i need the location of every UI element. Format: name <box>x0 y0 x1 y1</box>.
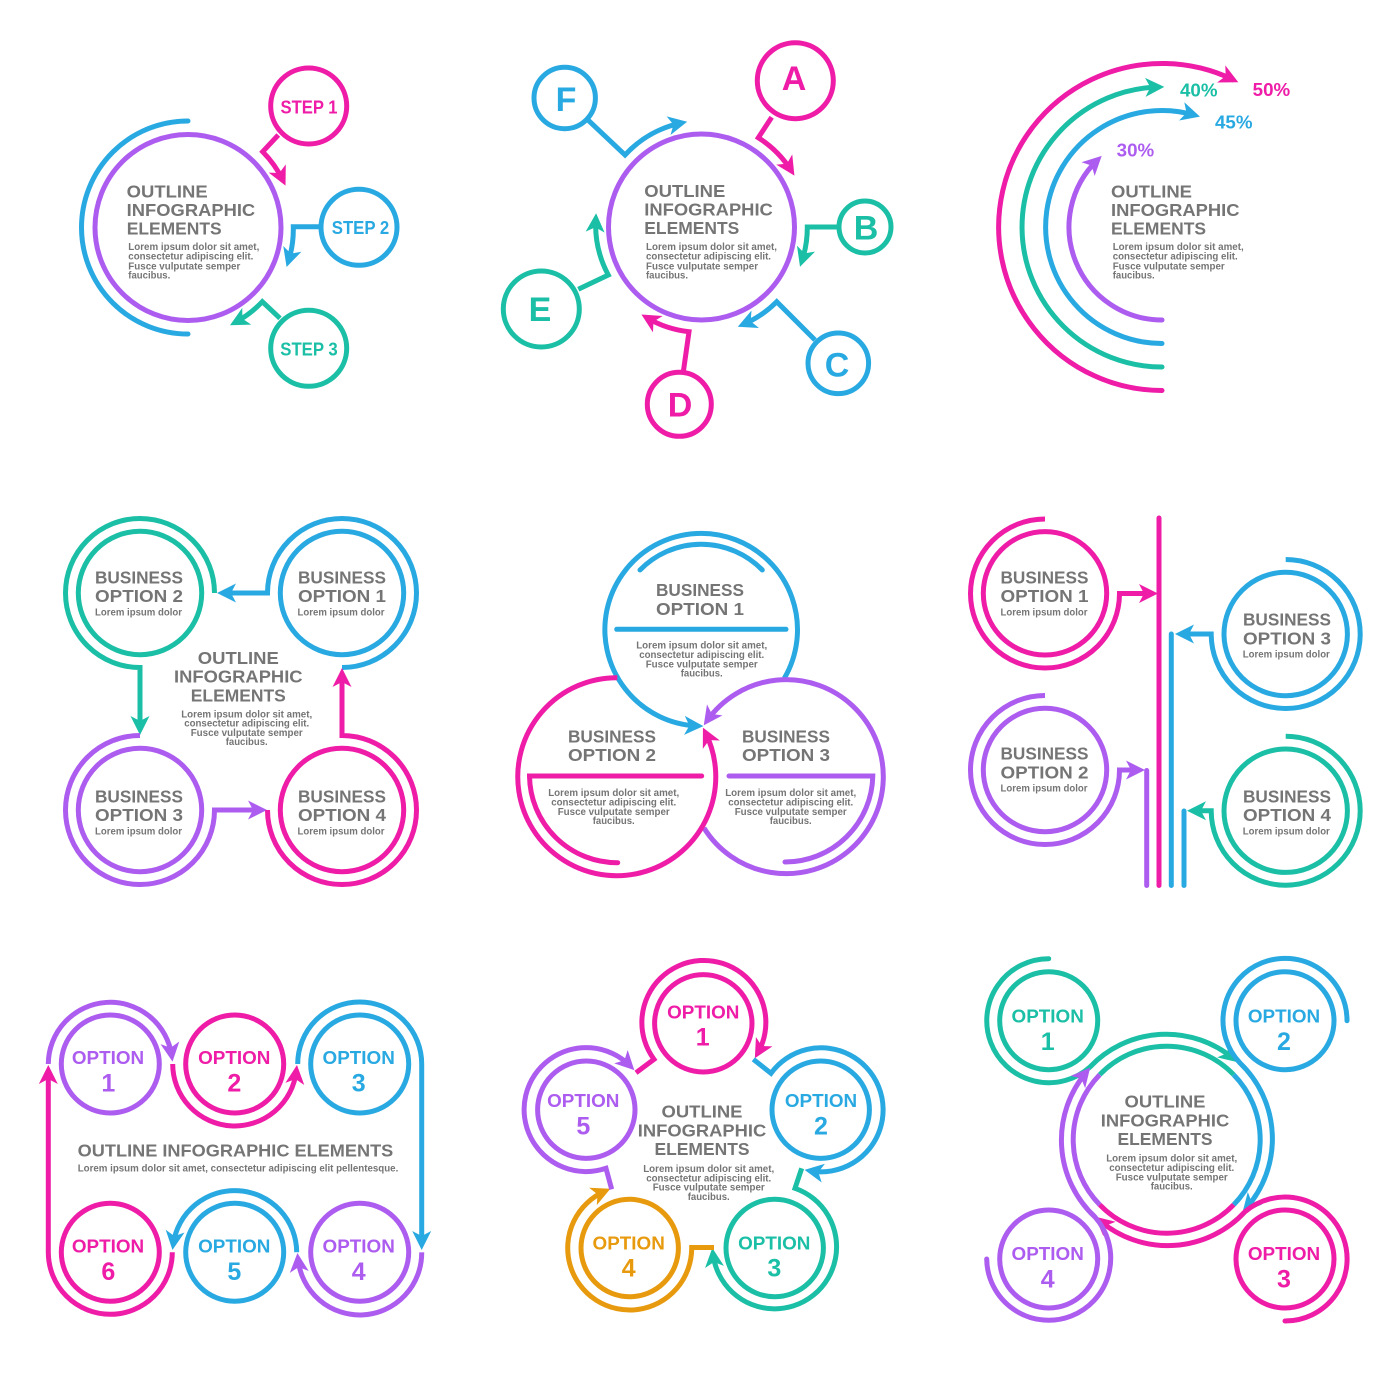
heading: ELEMENTS <box>654 1139 750 1159</box>
body text: faucibus. <box>1151 1182 1193 1193</box>
option 4 <box>987 1072 1111 1320</box>
circle: option 1: BUSINESS <box>656 580 744 600</box>
step 1 <box>271 68 347 144</box>
body text: Fusce vulputate semper <box>128 261 240 272</box>
body text <box>643 1164 774 1203</box>
option 1 <box>48 1002 172 1113</box>
business option 3: OPTION 3 <box>95 805 183 825</box>
option 5: 5 <box>576 1113 590 1141</box>
circle: option 3: faucibus. <box>770 816 812 827</box>
body text: consectetur adipiscing elit. <box>1113 252 1238 263</box>
body text: Fusce vulputate semper <box>1113 261 1225 272</box>
body text: Fusce vulputate semper <box>191 728 303 739</box>
label 50%: 50% <box>1253 80 1290 100</box>
business option 2 <box>66 519 215 729</box>
body text: consectetur adipiscing elit. <box>646 252 771 263</box>
main circle <box>95 134 281 320</box>
panel: three overlapping circles <box>518 533 883 876</box>
business option 2: Lorem ipsum dolor <box>95 607 182 618</box>
heading <box>174 648 303 705</box>
option 2: OPTION <box>785 1091 857 1111</box>
step 3 <box>271 310 347 386</box>
panel: five options ring <box>524 960 883 1310</box>
arrow: B <box>802 227 838 261</box>
body text: Lorem ipsum dolor sit amet, <box>1113 242 1244 253</box>
panel: three steps <box>82 68 397 386</box>
body text: consectetur adipiscing elit. <box>184 719 309 730</box>
arrow: C <box>743 302 815 340</box>
option 2 <box>753 1048 883 1172</box>
node E: E <box>529 291 551 329</box>
business option 2: OPTION 2 <box>95 586 183 606</box>
business option 2: Lorem ipsum dolor <box>1000 784 1088 795</box>
business option 1 <box>223 519 416 668</box>
step 3: STEP 3 <box>280 340 338 360</box>
node D <box>647 372 711 436</box>
body text <box>128 242 260 282</box>
body text: faucibus. <box>226 737 268 748</box>
step 1: STEP 1 <box>280 97 338 117</box>
option 4: 4 <box>352 1258 366 1286</box>
business option 3: BUSINESS <box>1243 610 1331 630</box>
circle: option 3: OPTION 3 <box>742 745 830 765</box>
option 2 <box>173 1015 296 1126</box>
heading: OUTLINE INFOGRAPHIC ELEMENTS <box>78 1141 393 1161</box>
label 45%: 45% <box>1215 112 1252 132</box>
business option 4: OPTION 4 <box>298 805 386 825</box>
option 5: OPTION <box>547 1091 619 1111</box>
option 1: 1 <box>101 1070 115 1098</box>
body text <box>646 242 777 282</box>
option 5: 5 <box>227 1258 241 1286</box>
option 3: 3 <box>1277 1265 1291 1293</box>
heading: OUTLINE <box>662 1102 742 1122</box>
central ring <box>1073 1046 1260 1233</box>
arc 30% <box>1069 160 1162 320</box>
heading: INFOGRAPHIC <box>644 200 773 220</box>
arrow: step 1 <box>263 135 283 180</box>
business option 1 <box>970 519 1152 668</box>
heading: ELEMENTS <box>127 218 222 238</box>
circle: option 3: Fusce vulputate semper <box>735 807 847 818</box>
option 5: OPTION <box>198 1236 270 1256</box>
heading: ELEMENTS <box>191 685 286 705</box>
option 1 <box>987 959 1233 1083</box>
option 2: OPTION <box>198 1048 270 1068</box>
heading: INFOGRAPHIC <box>638 1120 767 1140</box>
panel: six options loop <box>48 1002 422 1315</box>
circle: option 3 <box>704 680 883 874</box>
node E <box>503 271 579 347</box>
option 3: 3 <box>767 1255 781 1283</box>
circle: option 3: BUSINESS <box>742 726 830 746</box>
node B <box>839 201 891 253</box>
panel: central circle with four satellites <box>987 958 1347 1321</box>
circle: option 2 <box>518 678 716 876</box>
business option 2: OPTION 2 <box>1000 762 1089 782</box>
circle: option 2: Lorem ipsum dolor sit amet, <box>548 788 679 799</box>
circle: option 2: Fusce vulputate semper <box>558 807 670 818</box>
option 2: OPTION <box>1248 1006 1320 1026</box>
option 2: 2 <box>227 1070 241 1098</box>
business option 3 <box>66 736 261 884</box>
arrow: step 3 <box>235 302 280 322</box>
body text: consectetur adipiscing elit. <box>1109 1163 1234 1174</box>
body text: Lorem ipsum dolor sit amet, <box>1106 1154 1237 1165</box>
circle: option 2: OPTION 2 <box>568 745 656 765</box>
circle: option 1: Fusce vulputate semper <box>646 659 758 670</box>
option 4 <box>568 1191 714 1310</box>
outer blue arc <box>82 121 188 334</box>
label 40%: 40% <box>1180 81 1218 101</box>
body text: Lorem ipsum dolor sit amet, <box>128 242 260 253</box>
business option 1: Lorem ipsum dolor <box>1000 607 1088 618</box>
option 2: 2 <box>814 1113 828 1141</box>
heading <box>127 181 256 238</box>
circle: option 2: faucibus. <box>593 816 635 827</box>
option 4 <box>298 1203 422 1315</box>
business option 1: Lorem ipsum dolor <box>298 607 385 618</box>
body text: Lorem ipsum dolor sit amet, <box>643 1164 774 1175</box>
heading <box>644 181 773 238</box>
body text: Lorem ipsum dolor sit amet, consectetur adipiscing elit pellentesque. <box>78 1164 399 1175</box>
circle: option 1: OPTION 1 <box>656 599 744 619</box>
business option 3 <box>1181 560 1360 708</box>
step 2: STEP 2 <box>332 218 389 238</box>
business option 2: BUSINESS <box>95 567 183 587</box>
option 1: OPTION <box>667 1002 739 1022</box>
business option 4 <box>1193 736 1360 885</box>
arrow: D <box>647 318 689 372</box>
business option 4: Lorem ipsum dolor <box>1243 826 1330 837</box>
heading: ELEMENTS <box>644 218 739 238</box>
option 5 <box>524 1048 635 1189</box>
body text: Fusce vulputate semper <box>1116 1172 1228 1183</box>
option 2: 2 <box>1277 1028 1291 1056</box>
body text: Lorem ipsum dolor sit amet, <box>181 709 312 720</box>
panel: timeline with four options <box>970 518 1360 886</box>
arrow: E <box>578 219 608 289</box>
business option 3: BUSINESS <box>95 786 183 806</box>
heading: INFOGRAPHIC <box>1111 200 1240 220</box>
business option 3: OPTION 3 <box>1243 628 1331 648</box>
circle: option 3: consectetur adipiscing elit. <box>728 797 853 808</box>
panel: A to F <box>503 43 891 436</box>
business option 2: BUSINESS <box>1000 744 1088 764</box>
body text: faucibus. <box>128 271 171 282</box>
option 3 <box>713 1168 837 1309</box>
node A <box>757 43 833 119</box>
option 3 <box>1100 1197 1347 1321</box>
body text <box>1113 242 1244 282</box>
business option 3: Lorem ipsum dolor <box>1243 650 1330 661</box>
arc 45% <box>1046 111 1194 344</box>
option 1: 1 <box>1041 1028 1055 1056</box>
panel: four business options cycle <box>66 519 417 884</box>
option 1: OPTION <box>1012 1006 1084 1026</box>
option 2 <box>1223 958 1347 1208</box>
option 3: OPTION <box>1248 1244 1320 1264</box>
option 3 <box>298 1002 422 1244</box>
circle: option 1: faucibus. <box>681 669 723 680</box>
node A: A <box>782 60 806 98</box>
option 6: OPTION <box>72 1236 144 1256</box>
option 5 <box>173 1191 297 1301</box>
circle: option 1: Lorem ipsum dolor sit amet, <box>636 641 767 652</box>
main circle <box>608 134 794 320</box>
body text <box>1106 1154 1237 1193</box>
heading: INFOGRAPHIC <box>127 200 256 220</box>
business option 2 <box>970 696 1139 844</box>
business option 1: BUSINESS <box>1000 567 1088 587</box>
heading: INFOGRAPHIC <box>174 667 303 687</box>
option 6: 6 <box>101 1258 115 1286</box>
heading: OUTLINE <box>1111 181 1192 201</box>
heading: OUTLINE <box>198 648 279 668</box>
body text: Fusce vulputate semper <box>646 261 758 272</box>
option 4: 4 <box>1041 1265 1055 1293</box>
node C: C <box>825 347 849 385</box>
heading: OUTLINE <box>127 181 208 201</box>
option 1: OPTION <box>72 1048 144 1068</box>
body text <box>181 709 312 748</box>
business option 4: OPTION 4 <box>1243 805 1331 825</box>
heading: OUTLINE <box>1124 1092 1206 1112</box>
circle: option 2: consectetur adipiscing elit. <box>551 797 676 808</box>
arrow: A <box>758 117 791 170</box>
vertical lines <box>1147 518 1184 886</box>
business option 4: BUSINESS <box>298 786 386 806</box>
body text: faucibus. <box>688 1192 730 1203</box>
business option 4: BUSINESS <box>1243 786 1331 806</box>
option 3: 3 <box>352 1070 366 1098</box>
option 4: OPTION <box>323 1236 395 1256</box>
option 1: 1 <box>696 1024 710 1052</box>
node D: D <box>668 387 692 425</box>
node F: F <box>556 81 576 119</box>
body text: faucibus. <box>646 271 688 282</box>
option 3: OPTION <box>323 1048 395 1068</box>
option 4: 4 <box>622 1255 636 1283</box>
body text: consectetur adipiscing elit. <box>646 1173 771 1184</box>
node B: B <box>854 209 878 247</box>
business option 1: OPTION 1 <box>298 586 386 606</box>
option 3: OPTION <box>738 1233 810 1253</box>
circle: option 2: BUSINESS <box>568 726 656 746</box>
heading: ELEMENTS <box>1118 1129 1212 1149</box>
heading: INFOGRAPHIC <box>1101 1110 1230 1130</box>
arc 50% <box>999 64 1233 390</box>
business option 3: Lorem ipsum dolor <box>95 826 182 837</box>
option 4: OPTION <box>593 1233 665 1253</box>
business option 4 <box>268 674 416 884</box>
option 1 <box>636 960 766 1073</box>
option 4: OPTION <box>1012 1244 1084 1264</box>
step 2 <box>321 189 397 265</box>
label 30%: 30% <box>1117 141 1154 161</box>
business option 1: BUSINESS <box>298 567 386 587</box>
body text: faucibus. <box>1113 271 1155 282</box>
arc 40% <box>1022 87 1162 367</box>
arrow: step 2 <box>288 227 320 261</box>
heading <box>1101 1092 1230 1149</box>
business option 4: Lorem ipsum dolor <box>298 826 385 837</box>
body text: Fusce vulputate semper <box>653 1183 765 1194</box>
arrow: F <box>588 120 681 155</box>
business option 1: OPTION 1 <box>1000 586 1089 606</box>
heading <box>1111 181 1240 238</box>
circle: option 3: Lorem ipsum dolor sit amet, <box>725 788 856 799</box>
body text: Lorem ipsum dolor sit amet, <box>646 242 777 253</box>
body text: consectetur adipiscing elit. <box>128 252 254 263</box>
heading: ELEMENTS <box>1111 218 1206 238</box>
heading <box>638 1102 767 1159</box>
node F <box>534 67 595 129</box>
circle: option 1 <box>605 533 797 726</box>
node C <box>808 333 869 394</box>
option 6 <box>48 1071 172 1314</box>
heading: OUTLINE <box>644 181 725 201</box>
circle: option 1: consectetur adipiscing elit. <box>639 650 764 661</box>
panel: percentage arcs <box>999 64 1290 390</box>
